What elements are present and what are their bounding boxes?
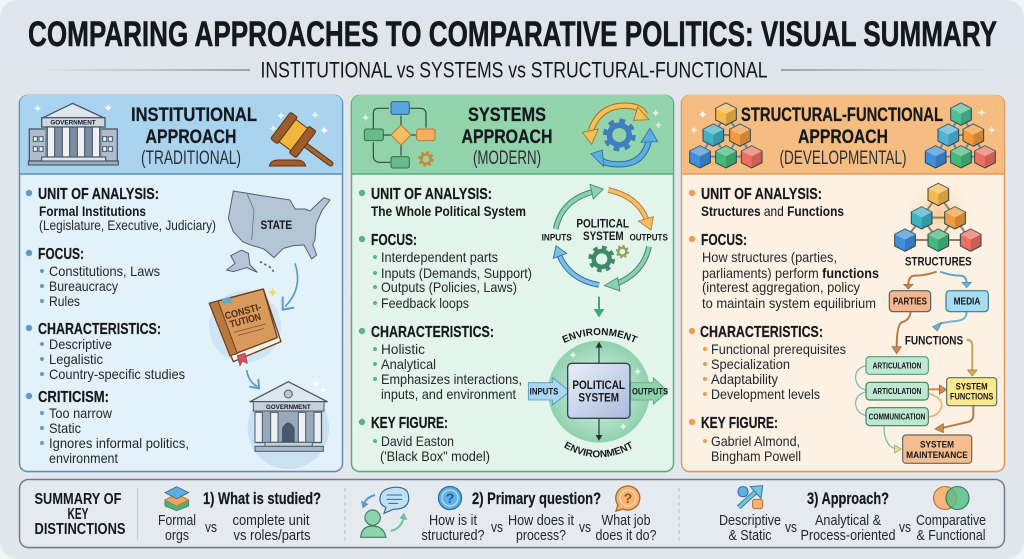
summary heading: [34, 491, 126, 538]
bullet: focus: Rules: [49, 293, 80, 309]
column: what is studied: Formal: [158, 513, 196, 529]
column: primary question: vs: [579, 520, 591, 536]
column: primary question: structured?: [422, 528, 484, 544]
panel header: institutional: (TRADITIONAL): [141, 147, 241, 169]
bullet: focus: [359, 232, 532, 311]
icon: constitution book: [209, 288, 281, 366]
icon: government building header: [28, 103, 118, 165]
bullet: characteristics: Emphasizes interactions,: [381, 371, 522, 387]
bullet: characteristics: CHARACTERISTICS:: [371, 324, 494, 341]
bullet: unit of analysis: UNIT OF ANALYSIS:: [701, 186, 822, 203]
column: primary question: 2) Primary question?: [472, 490, 601, 508]
bullet: characteristics: [689, 324, 846, 402]
column: primary question: vs: [491, 520, 503, 536]
column: approach: & Functional: [916, 528, 986, 544]
bullet: focus: parliaments) perform functions: [702, 265, 879, 281]
bullet: unit of analysis: The Whole Political System: [371, 203, 526, 219]
column: primary question: What job: [602, 513, 650, 529]
diagram: functions flow: SYSTEM: [956, 381, 988, 391]
bullet: unit of analysis: [689, 186, 844, 219]
panel header: institutional: APPROACH: [146, 126, 236, 148]
diagram: environment black box: ENVIRONMENT: [564, 441, 632, 458]
bullet: focus: Feedback loops: [381, 295, 469, 311]
bullet: criticism: CRITICISM:: [38, 389, 109, 406]
icon: venn circles: [934, 486, 969, 510]
diagram: environment black box: ENVIRONMENT: [562, 328, 638, 343]
panel: summary of key distinctions: [20, 480, 1004, 548]
column: what is studied: vs roles/parts: [234, 528, 310, 544]
icon: gear with cycle arrows: [582, 106, 662, 167]
panel header: systems: SYSTEMS: [468, 104, 546, 126]
column: primary question: does it do?: [596, 528, 656, 544]
bullet: focus: Interdependent parts: [381, 249, 498, 265]
bullet: characteristics: Legalistic: [49, 351, 103, 367]
diagram: environment black box: SYSTEM: [578, 391, 619, 405]
bullet: focus: FOCUS:: [371, 232, 417, 249]
diagram: functions flow: MEDIA: [954, 297, 980, 308]
diagram: functions flow: PARTIES: [893, 297, 927, 308]
icon: question circle: [438, 486, 462, 510]
icon: government building: [248, 380, 329, 469]
bullet: key figure: Bingham Powell: [711, 448, 801, 464]
diagram: functions flow: FUNCTIONS: [905, 333, 963, 347]
subtitle: INSTITUTIONAL vs SYSTEMS vs STRUCTURAL-FUNCTIONAL: [260, 58, 768, 82]
bullet: focus: (interest aggregation, policy: [702, 279, 860, 295]
bullet: criticism: Ignores informal politics,: [49, 435, 189, 451]
bullet: key figure: [689, 415, 801, 464]
column: approach: vs: [785, 520, 797, 536]
icon: government building: GOVERNMENT: [266, 404, 311, 411]
icon: constitution book: CONSTI-: [224, 302, 263, 322]
icon: stacked layers: [165, 487, 189, 511]
panel: structural-functional approach: [682, 95, 1004, 472]
diagram: environment black box: [528, 328, 668, 458]
panel: institutional approach: [20, 95, 342, 472]
panel header: institutional: INSTITUTIONAL: [131, 104, 257, 126]
bullet: focus: Constitutions, Laws: [49, 263, 160, 279]
panel header: institutional: [20, 95, 342, 174]
diagram: structures cubes: STRUCTURES: [905, 255, 972, 269]
arrow: state to constitution: [283, 263, 298, 310]
bullet: characteristics: Development levels: [711, 386, 820, 402]
bullet: key figure: ('Black Box" model): [380, 448, 490, 464]
diagram: political system cycle: OUTPUTS: [629, 233, 668, 243]
bullet: characteristics: inputs, and environment: [381, 386, 516, 402]
column: what is studied: orgs: [165, 528, 189, 544]
bullet: focus: FOCUS:: [701, 232, 747, 249]
summary heading: DISTINCTIONS: [34, 521, 126, 538]
bullet: criticism: Static: [49, 420, 81, 436]
bullet: unit of analysis: Structures and Functions: [701, 203, 844, 219]
column: what is studied: vs: [205, 520, 217, 536]
bullet: key figure: Gabriel Almond,: [711, 433, 800, 449]
bullet: criticism: [26, 389, 189, 466]
icon: person with speech bubble: [361, 487, 409, 537]
summary heading: KEY: [68, 506, 89, 523]
bullet: characteristics: [359, 324, 522, 402]
diagram: functions flow: ARTICULATION: [873, 387, 922, 396]
diagram: political system cycle: [542, 184, 668, 291]
bullet: focus: FOCUS:: [38, 246, 84, 263]
bullet: unit of analysis: [26, 186, 216, 233]
bullet: key figure: David Easton: [381, 433, 454, 449]
icon: government building header: GOVERNMENT: [50, 120, 96, 127]
panel: systems approach: [350, 94, 674, 472]
column: primary question: [422, 490, 656, 544]
bullet: characteristics: Country-specific studies: [49, 366, 185, 382]
icon: question circle: ?: [446, 490, 454, 506]
bullet: focus: How structures (parties,: [702, 249, 837, 265]
diagram: environment black box: INPUTS: [530, 387, 558, 397]
bullet: focus: to maintain system equilibrium: [702, 295, 876, 311]
diagram: environment black box: POLITICAL: [572, 378, 625, 392]
arrow: cycle to environment: [594, 297, 604, 318]
diagram: political system cycle: SYSTEM: [583, 229, 624, 243]
bullet: unit of analysis: (Legislature, Executive, Judiciary): [39, 217, 216, 233]
icon: approach shapes with arrow: [738, 486, 763, 509]
icon: question speech bubble: ?: [624, 490, 632, 506]
bullet: characteristics: Descriptive: [49, 336, 112, 352]
column: approach: & Static: [728, 528, 772, 544]
column: approach: [719, 490, 986, 544]
icon: cube network right: [925, 103, 996, 168]
column: approach: Process-oriented: [800, 528, 896, 544]
column: what is studied: 1) What is studied?: [203, 490, 321, 508]
bullet: focus: Bureaucracy: [49, 278, 118, 294]
summary heading: SUMMARY OF: [34, 491, 122, 508]
column: primary question: How does it: [508, 513, 574, 529]
panel header: structural-functional: STRUCTURAL-FUNCTIONAL: [741, 104, 943, 126]
bullet: focus: Outputs (Policies, Laws): [381, 279, 517, 295]
icon: state map: [227, 191, 330, 273]
bullet: criticism: Too narrow: [49, 405, 113, 421]
icon: cube network left: [690, 103, 762, 168]
diagram: functions flow: FUNCTIONS: [950, 392, 993, 402]
diagram: functions flow: SYSTEM: [920, 439, 954, 449]
panel header: structural-functional: APPROACH: [798, 126, 888, 148]
column: approach: Comparative: [916, 513, 986, 529]
icon: question speech bubble: [616, 486, 640, 511]
arrow: constitution to government: [247, 370, 259, 388]
bullet: characteristics: CHARACTERISTICS:: [700, 324, 823, 341]
diagram: political system cycle: POLITICAL: [576, 217, 629, 231]
icon: flowchart: [362, 102, 435, 168]
bullet: characteristics: [26, 321, 185, 382]
column: what is studied: complete unit: [232, 513, 310, 529]
bullet: characteristics: Functional prerequisites: [711, 341, 846, 357]
bullet: characteristics: Analytical: [381, 356, 436, 372]
bullet: unit of analysis: [359, 186, 526, 219]
bullet: characteristics: Adaptability: [711, 371, 778, 387]
panel header: structural-functional: (DEVELOPMENTAL): [780, 147, 906, 169]
panel header: structural-functional: [682, 95, 1004, 174]
bullet: unit of analysis: UNIT OF ANALYSIS:: [371, 186, 492, 203]
column: what is studied: [158, 490, 321, 544]
column: approach: 3) Approach?: [807, 490, 889, 508]
panel header: systems: APPROACH: [462, 126, 552, 148]
diagram: structures cubes: [895, 175, 981, 269]
column: approach: vs: [899, 520, 911, 536]
column: primary question: How is it: [429, 513, 477, 529]
column: approach: Descriptive: [719, 513, 781, 529]
icon: constitution book: TUTION: [229, 312, 262, 331]
bullet: focus: [689, 232, 879, 311]
bullet: unit of analysis: UNIT OF ANALYSIS:: [38, 186, 159, 203]
bullet: key figure: [359, 415, 490, 464]
diagram: functions flow: ARTICULATION: [873, 361, 922, 370]
bullet: characteristics: Specialization: [711, 356, 790, 372]
icon: gavel: [269, 111, 331, 166]
diagram: functions flow: COMMUNICATION: [869, 412, 926, 421]
icon: state map: STATE: [260, 218, 292, 232]
bullet: characteristics: CHARACTERISTICS:: [38, 321, 161, 338]
bullet: key figure: KEY FIGURE:: [371, 415, 448, 432]
bullet: unit of analysis: Formal Institutions: [39, 203, 146, 219]
column: primary question: process?: [516, 528, 566, 544]
diagram: functions flow: MAINTENANCE: [906, 450, 968, 460]
panel header: systems: [352, 95, 673, 174]
column: approach: Analytical &: [815, 513, 881, 529]
diagram: political system cycle: INPUTS: [542, 233, 572, 243]
bullet: criticism: environment: [49, 450, 118, 466]
bullet: focus: Inputs (Demands, Support): [381, 265, 532, 281]
diagram: functions flow: [856, 272, 997, 463]
diagram: environment black box: OUTPUTS: [632, 387, 668, 397]
bullet: key figure: KEY FIGURE:: [701, 415, 778, 432]
bullet: focus: [26, 246, 160, 309]
panel header: systems: (MODERN): [473, 147, 541, 169]
bullet: characteristics: Holistic: [381, 341, 425, 357]
